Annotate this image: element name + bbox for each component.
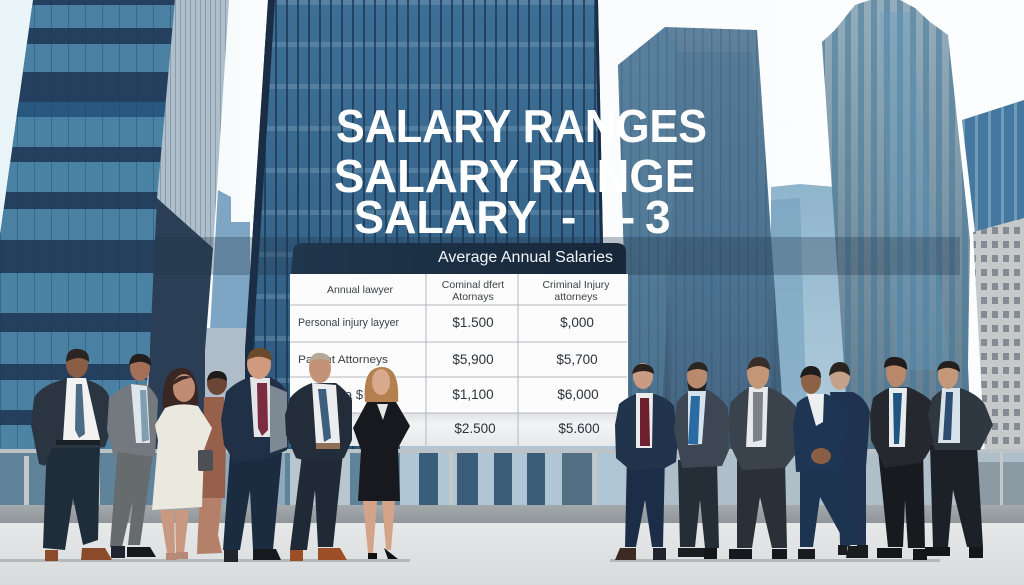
title line 3: 3 xyxy=(645,191,671,243)
man 9 behind, navy suit xyxy=(829,362,870,555)
column headings: attorneys xyxy=(554,291,598,303)
title line 3: - xyxy=(620,191,635,243)
building: second tower xyxy=(618,27,786,455)
title line 3: - xyxy=(561,191,576,243)
salary values: $1.500 xyxy=(452,315,494,330)
column headings: Cominal dfert xyxy=(442,279,504,291)
table body xyxy=(290,274,628,413)
building: far right tower xyxy=(962,100,1024,455)
column headings xyxy=(327,279,610,303)
building: left tower xyxy=(0,0,229,452)
title line 1: SALARY RANGES xyxy=(336,100,707,152)
title line 3 xyxy=(354,191,671,243)
salary table xyxy=(290,243,628,446)
man 1 xyxy=(31,349,112,561)
table header: Average Annual Salaries xyxy=(438,249,613,266)
man 2 gray suit xyxy=(107,354,158,558)
man 5 navy suit burgundy tie xyxy=(615,363,678,560)
translucent band xyxy=(155,237,960,275)
title line 2: SALARY RANGE xyxy=(334,150,695,202)
salary values: $5.600 xyxy=(558,421,600,436)
salary values: $2.500 xyxy=(454,421,496,436)
woman in black suit xyxy=(353,367,410,559)
salary values: $5,900 xyxy=(452,352,494,367)
man 7 charcoal suit xyxy=(728,357,800,559)
salary values: $6,000 xyxy=(557,387,599,402)
row labels: a $ xyxy=(345,387,364,402)
salary values: $1,100 xyxy=(452,387,494,402)
column headings: Criminal Injury xyxy=(542,279,610,291)
rooftop railing xyxy=(0,446,1024,518)
salary values xyxy=(452,315,600,436)
last row background xyxy=(290,413,628,446)
skyline buildings xyxy=(0,0,1024,455)
title xyxy=(334,100,707,243)
rooftop floor xyxy=(0,523,1024,585)
row labels xyxy=(298,317,399,402)
salary values: $5,700 xyxy=(556,352,598,367)
man 11 dark suit striped tie xyxy=(925,361,993,558)
building: twin-top tower xyxy=(822,0,972,455)
man 6 bearded, grey suit xyxy=(674,362,729,559)
building: small rear towers left xyxy=(205,190,250,453)
column headings: Annual lawyer xyxy=(327,284,393,296)
concrete ledge xyxy=(0,505,1024,523)
ground shadow xyxy=(0,559,940,562)
left group of lawyers xyxy=(31,348,410,562)
woman in brown dress xyxy=(197,371,227,554)
man 4 dark suit xyxy=(285,353,352,561)
table header xyxy=(291,243,626,274)
man 3 navy suit xyxy=(221,348,287,562)
woman in white suit xyxy=(152,368,213,560)
sky background xyxy=(0,0,1024,460)
column headings: Atornays xyxy=(452,291,494,303)
man 10 black suit xyxy=(870,357,936,560)
salary values: $,000 xyxy=(560,315,594,330)
title line 3: SALARY xyxy=(354,191,537,243)
right group of lawyers xyxy=(615,357,993,560)
building: rear mid tower xyxy=(771,184,852,455)
man 8 navy suit hands clasped xyxy=(793,366,868,559)
building: central tower xyxy=(245,0,605,455)
row labels: Patient Attorneys xyxy=(298,354,389,366)
row labels: Personal injury layyer xyxy=(298,317,399,329)
